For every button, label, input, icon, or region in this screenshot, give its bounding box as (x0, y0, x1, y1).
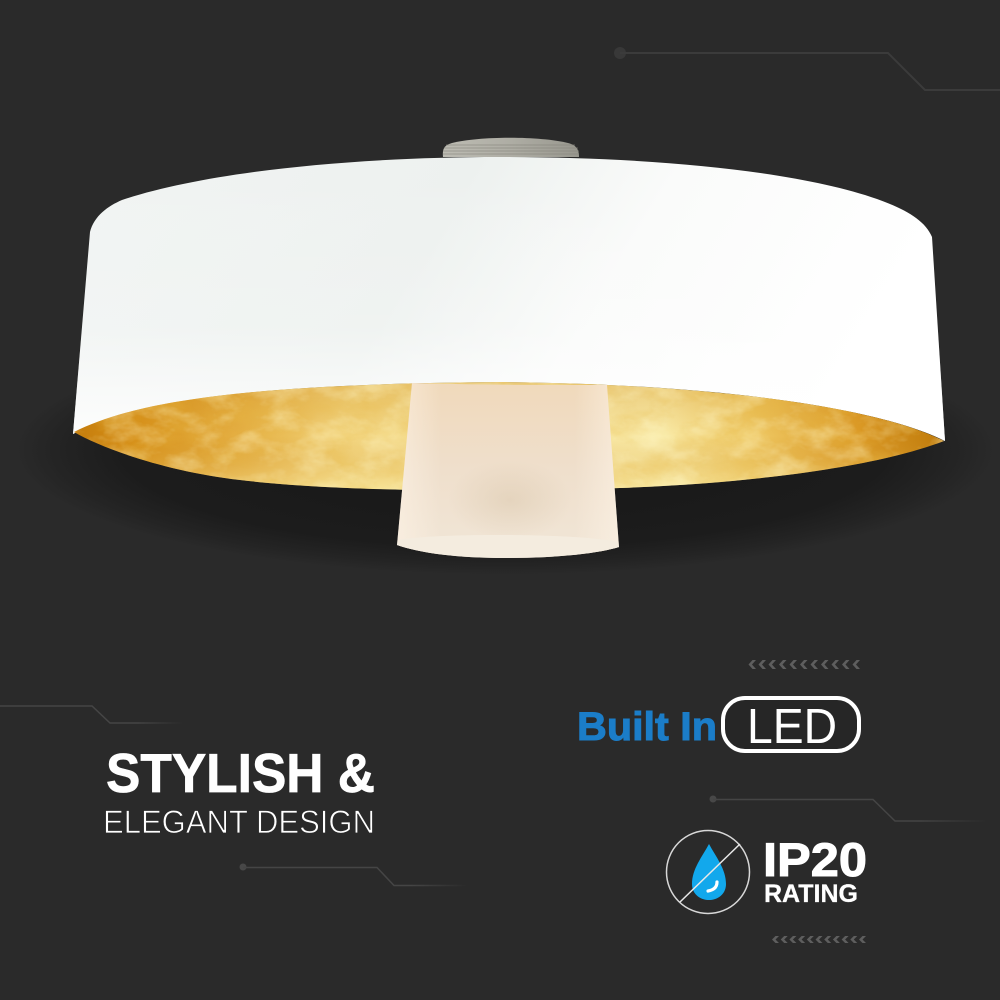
built in label: Built In (577, 705, 717, 749)
ceiling lamp product image (72, 138, 945, 560)
decorative circuit line: top right (614, 47, 1000, 90)
heading: stylish and elegant design (103, 742, 375, 840)
IP20 rating block (666, 830, 867, 914)
built in LED badge (577, 698, 859, 754)
gold inner shade (70, 378, 950, 494)
decorative circuit line: left (0, 706, 183, 723)
LED outlined pill (723, 698, 859, 751)
rating text: RATING (764, 880, 858, 908)
decorative circuit line: right (710, 796, 987, 821)
decorative circuit line: lower left (240, 864, 468, 886)
opal glass diffuser (397, 383, 619, 558)
chevrons: upper (748, 660, 860, 669)
chevrons: lower (772, 936, 866, 943)
icon: crossed-out water drop (666, 830, 750, 914)
lamp shadow (15, 325, 995, 575)
IP20 text: IP20 (763, 833, 867, 886)
heading: stylish and elegant design: STYLISH & (106, 742, 375, 804)
built in LED badge: LED (747, 700, 837, 754)
ceiling canopy (443, 138, 579, 157)
heading: stylish and elegant design: ELEGANT DESIGN (103, 804, 375, 840)
white shade (73, 157, 945, 441)
